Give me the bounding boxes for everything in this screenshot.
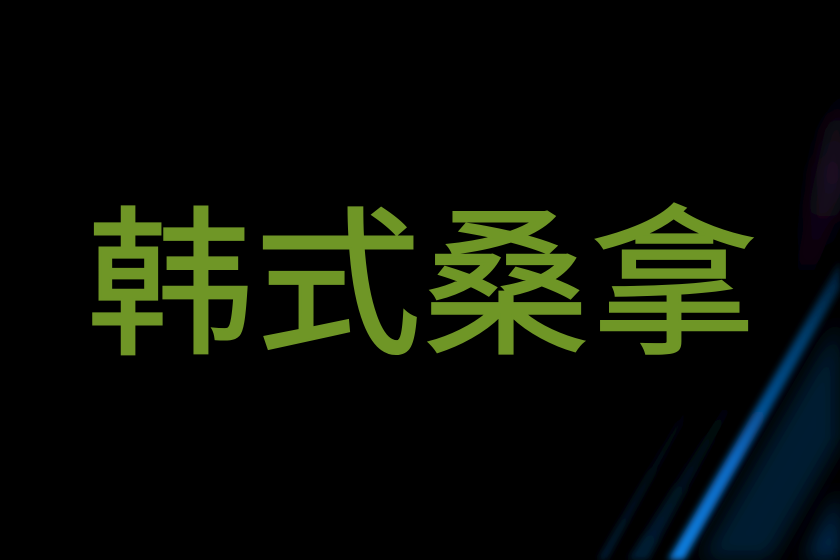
- title: 韩式桑拿: [87, 198, 759, 375]
- faint blue streaks: [598, 380, 730, 560]
- purple streak: [795, 85, 840, 270]
- blue glow band: [668, 262, 840, 560]
